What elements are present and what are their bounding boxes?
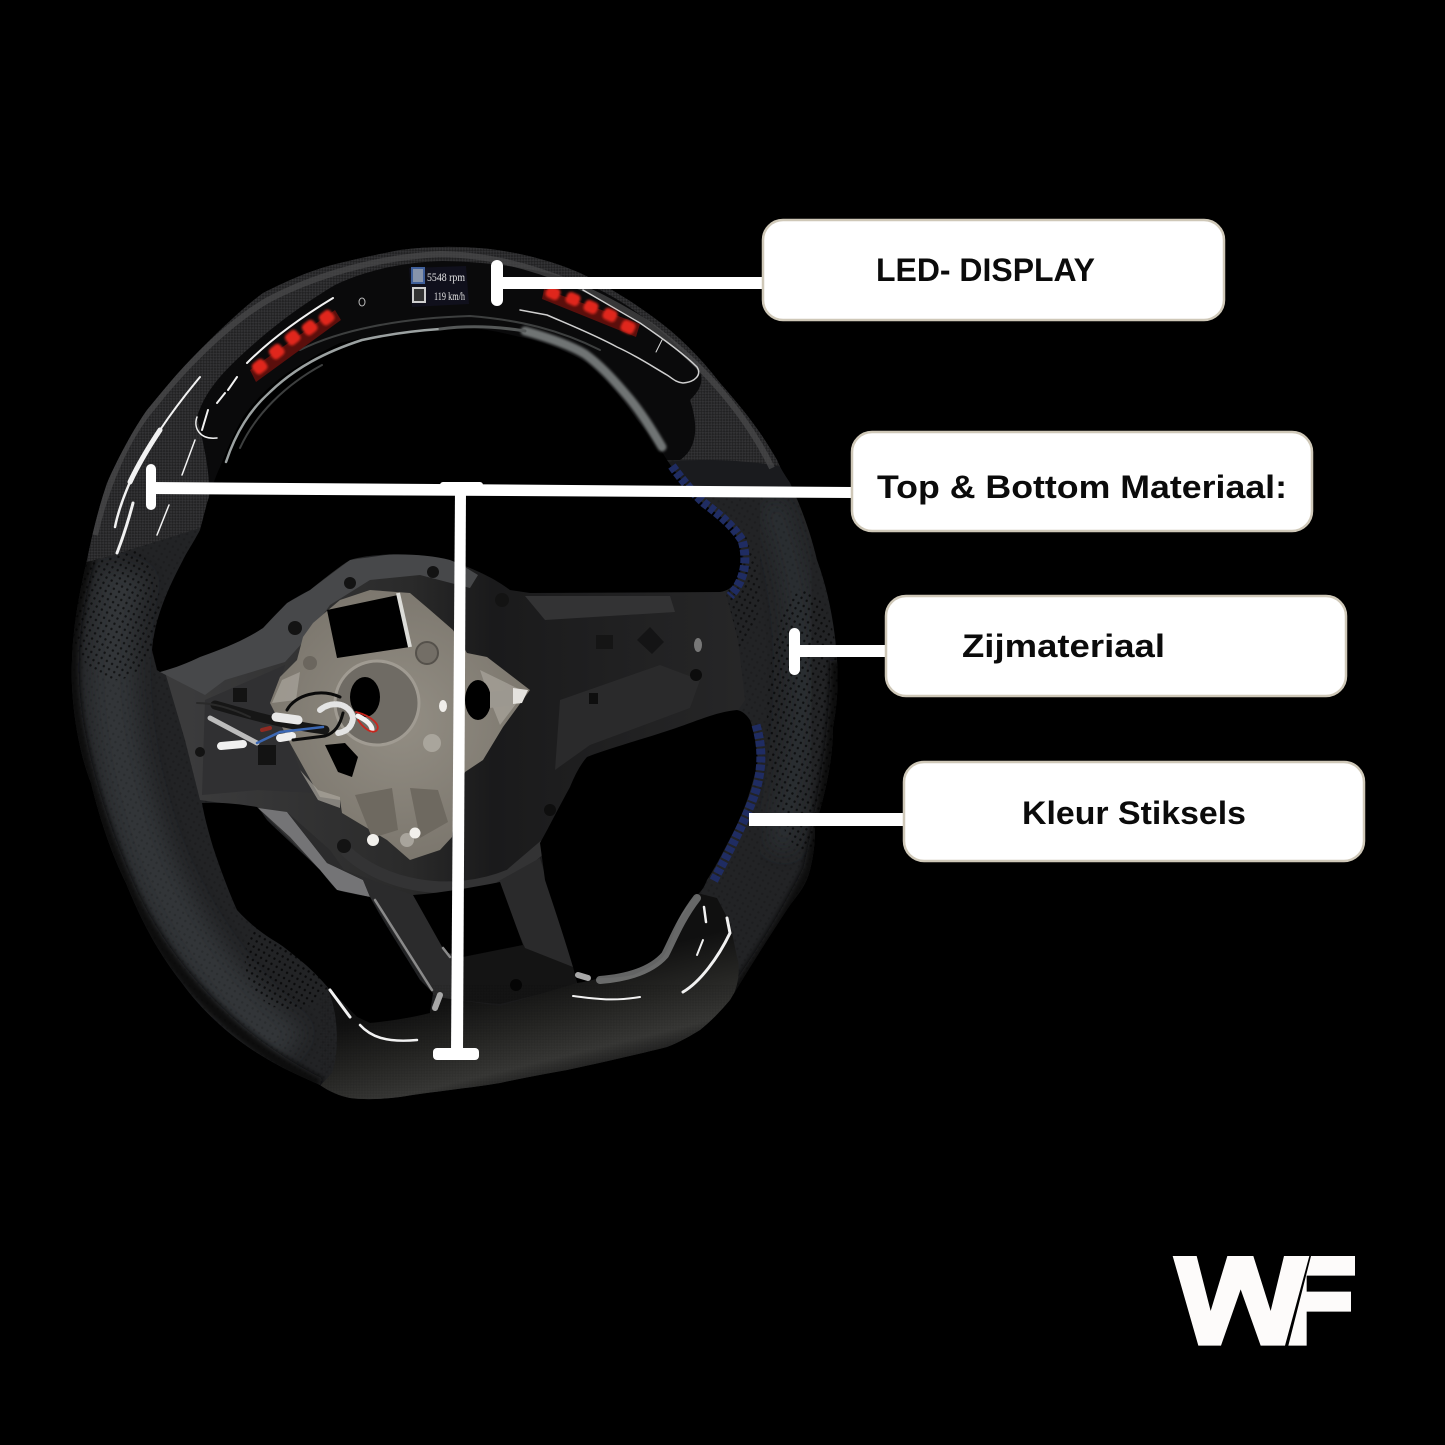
- label: top and bottom material: Top & Bottom Materiaal:: [877, 469, 1287, 505]
- bottom carbon section: [318, 893, 745, 1110]
- grip seam top right: [691, 460, 788, 486]
- bottom highlights: [330, 990, 350, 1017]
- hub mounting holes: [195, 566, 509, 853]
- label: side material: Zijmateriaal: [962, 628, 1165, 664]
- wheel openings: [152, 327, 758, 1023]
- right hub details: [525, 596, 702, 816]
- lower right spoke: [497, 858, 573, 967]
- gloss inner light bands: [226, 316, 662, 462]
- label: LED display: LED- DISPLAY: [876, 252, 1095, 288]
- blue stitching: [672, 466, 761, 882]
- plate lit patches: [272, 670, 525, 808]
- right LED bar: [542, 285, 640, 337]
- left LED bar: [250, 308, 341, 382]
- upper opening: [152, 327, 742, 672]
- gloss highlights: [115, 290, 730, 1041]
- hub left panel: [202, 665, 317, 795]
- window light edge: [398, 593, 410, 647]
- lit lower spoke surface: [258, 808, 370, 897]
- plate raised ring: [335, 661, 419, 745]
- gloss inner band: [197, 261, 701, 520]
- rim with leather grip, shading and perforation: [60, 200, 850, 1110]
- label: stitching colour: [904, 762, 1364, 861]
- label: top and bottom material: [852, 432, 1312, 531]
- lower left opening: [202, 803, 433, 1023]
- lower left spoke: [287, 812, 452, 1000]
- upper left spoke band: [160, 553, 478, 695]
- steering wheel: [60, 200, 850, 1110]
- small LED screen: 119 km/h: [434, 289, 465, 303]
- wire bundle: [197, 693, 378, 746]
- label: side material: [886, 596, 1346, 696]
- logo: WF: [1173, 1256, 1355, 1346]
- lower hub arc and spoke base: [345, 845, 545, 887]
- connector: stitching colour: [749, 813, 904, 826]
- hub back cover: [165, 556, 745, 1006]
- connector: side material: [789, 628, 886, 675]
- connector: LED display: [491, 260, 763, 306]
- top carbon section: [86, 246, 780, 562]
- connector: top and bottom material: [146, 464, 852, 1060]
- metal plate: [270, 590, 530, 860]
- small LED screen: [409, 266, 469, 307]
- plate bolts: [303, 642, 528, 847]
- label: stitching colour: Kleur Stiksels: [1022, 795, 1246, 831]
- rim outer edge light band: [95, 254, 772, 535]
- lower centre opening: [413, 882, 523, 957]
- plate holes: [325, 595, 491, 777]
- small LED screen: 5548 rpm: [427, 270, 466, 284]
- plate pockets: [355, 788, 448, 838]
- lower right opening: [540, 710, 758, 983]
- label: LED display: [763, 220, 1224, 320]
